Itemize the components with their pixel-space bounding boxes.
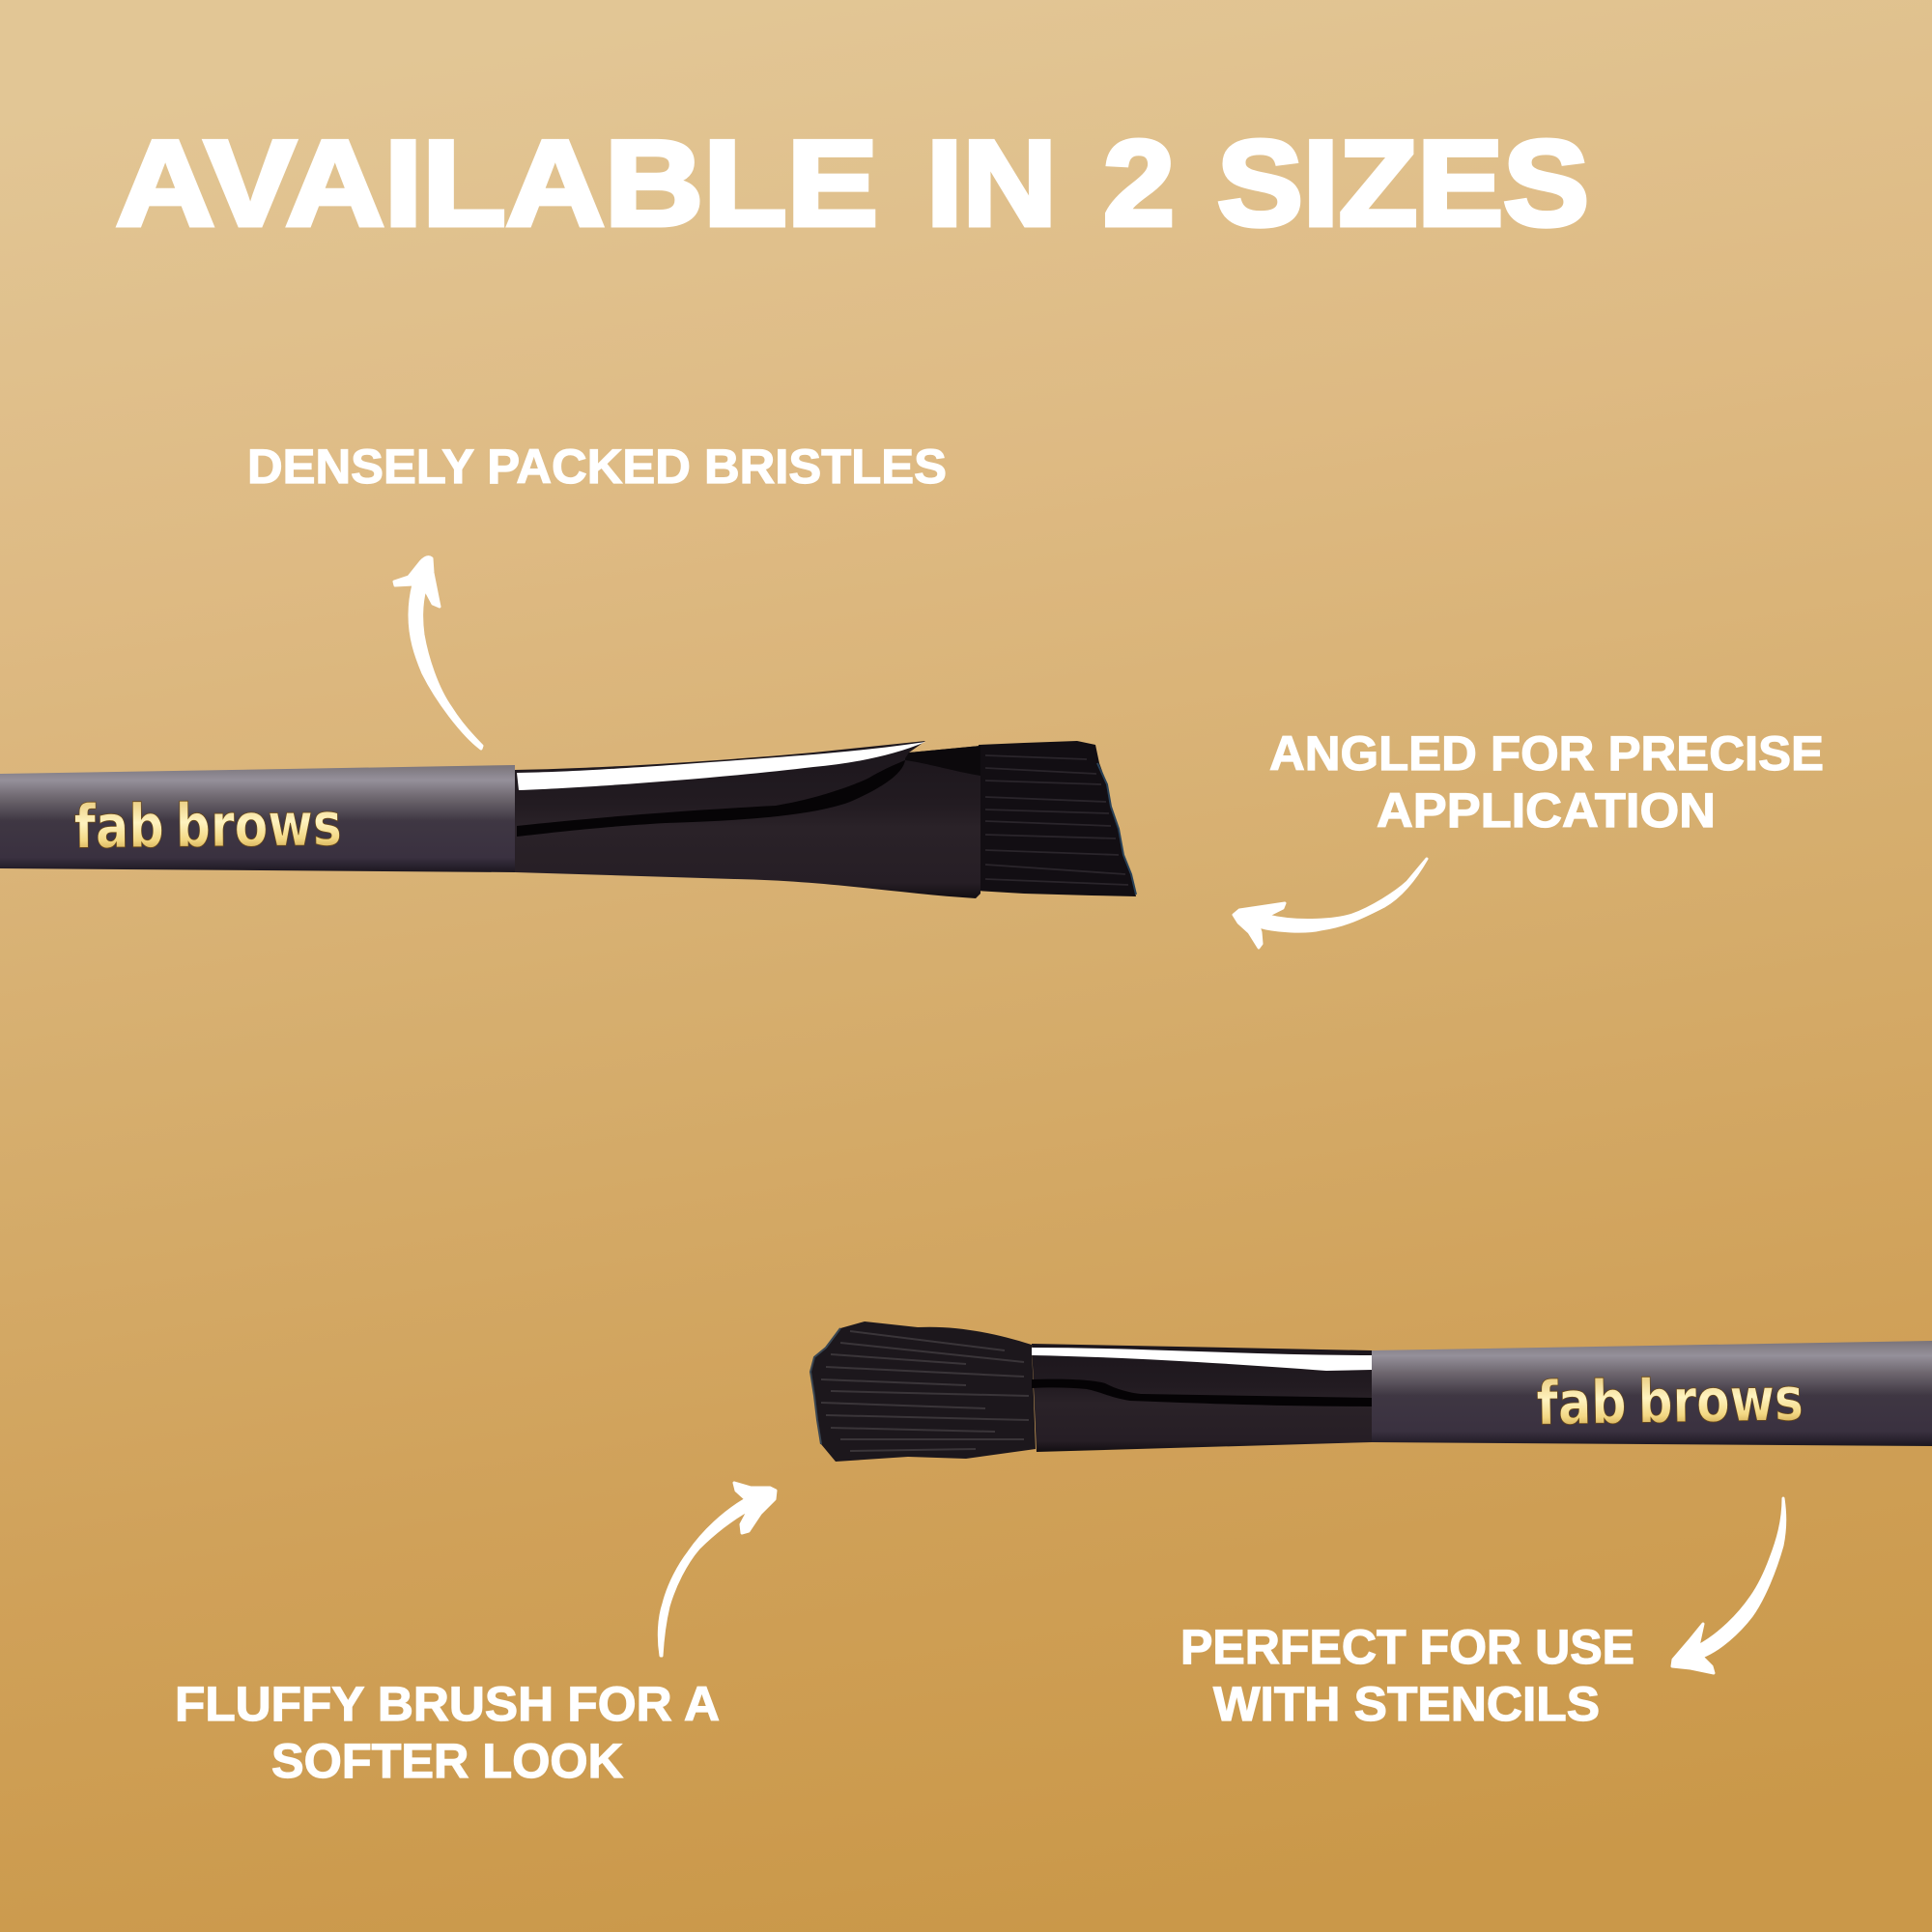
title: AVAILABLE	[116, 115, 878, 251]
fluffy brush	[810, 1321, 1932, 1462]
label: angled for precise application: ANGLED FOR PRECISE	[1269, 726, 1824, 781]
label: angled for precise application: APPLICATION	[1377, 783, 1716, 838]
icon: arrow to angled tip	[1234, 859, 1427, 948]
logo: fab brows: fab	[1536, 1367, 1627, 1438]
icon: arrow to stencils label	[1672, 1498, 1785, 1673]
label: angled for precise application	[1269, 726, 1824, 838]
ferrule	[1032, 1344, 1372, 1452]
logo: fab brows: fab	[73, 790, 164, 862]
logo: fab brows: brows	[175, 789, 342, 861]
title: SIZES	[1217, 115, 1589, 251]
handle	[0, 765, 515, 872]
label: fluffy brush: SOFTER LOOK	[271, 1734, 623, 1788]
icon: arrow to fluffy bristles	[659, 1483, 776, 1656]
icon: arrow to bristles	[394, 557, 482, 749]
title	[116, 115, 1589, 251]
ferrule highlight	[1032, 1348, 1372, 1371]
ferrule	[515, 741, 980, 898]
bristles	[810, 1321, 1036, 1462]
logo: fab brows	[1536, 1364, 1804, 1438]
ferrule highlight	[517, 742, 925, 790]
handle	[1372, 1341, 1932, 1446]
label: perfect for stencils	[1180, 1620, 1634, 1731]
logo: fab brows	[73, 789, 342, 862]
ferrule dark corner	[905, 746, 980, 776]
angled brush	[0, 741, 1136, 898]
title: 2	[1103, 115, 1175, 251]
bristles	[976, 741, 1136, 896]
title: IN	[926, 115, 1057, 251]
label: perfect for stencils: PERFECT FOR USE	[1180, 1620, 1634, 1674]
label: perfect for stencils: WITH STENCILS	[1213, 1677, 1600, 1731]
ferrule shadow band	[1032, 1379, 1372, 1406]
ferrule shadow band	[517, 760, 905, 837]
logo: fab brows: brows	[1637, 1364, 1804, 1437]
label: fluffy brush	[175, 1677, 720, 1788]
label: fluffy brush: FLUFFY BRUSH FOR A	[175, 1677, 720, 1731]
label: densely packed bristles: DENSELY PACKED BRISTLES	[247, 440, 947, 494]
